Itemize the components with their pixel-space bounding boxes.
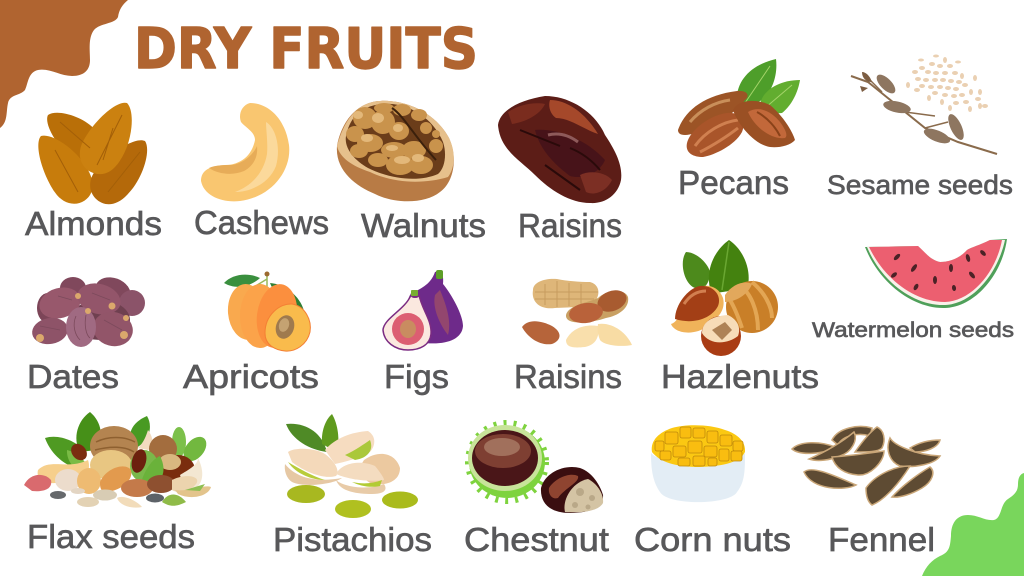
label: Fennel: Fennel — [828, 521, 935, 558]
icon: almonds — [24, 93, 161, 213]
icon: raisin (dried date) — [498, 96, 621, 203]
label: Dates: Dates — [27, 358, 119, 395]
icon: mixed nuts pile — [24, 412, 211, 508]
label: Watermelon seeds: Watermelon seeds — [812, 319, 1014, 342]
label: Raisins (peanuts row): Raisins — [514, 358, 622, 395]
icon: watermelon slice — [865, 239, 1007, 308]
icon: figs — [383, 270, 463, 350]
icon: pecans — [678, 59, 800, 157]
decorative brown corner blob — [0, 0, 128, 128]
icon: peanuts — [522, 279, 632, 347]
label: Corn nuts: Corn nuts — [634, 521, 791, 558]
icon: chestnuts — [468, 423, 603, 513]
icon: pistachios — [285, 414, 418, 518]
label: Chestnut: Chestnut — [464, 521, 609, 558]
label: Pistachios: Pistachios — [273, 521, 432, 558]
label: Cashews: Cashews — [194, 204, 329, 241]
icon: apricots — [224, 272, 310, 351]
label: Figs: Figs — [384, 358, 449, 395]
label: Walnuts: Walnuts — [361, 207, 486, 244]
label: Raisins: Raisins — [518, 207, 622, 244]
icon: fennel seeds — [792, 426, 940, 505]
label: Flax seeds: Flax seeds — [27, 518, 195, 555]
decorative green corner blob — [922, 473, 1024, 576]
label: Apricots: Apricots — [183, 358, 319, 395]
icon: sesame branch and seeds — [851, 54, 997, 154]
icon: walnut — [337, 101, 454, 201]
label: Sesame seeds: Sesame seeds — [827, 170, 1013, 200]
label: Almonds: Almonds — [25, 205, 162, 242]
title: DRY FRUITS — [134, 17, 478, 82]
icon: dates — [30, 273, 145, 351]
icon: corn nuts in white bowl — [651, 425, 745, 502]
label: Hazlenuts: Hazlenuts — [661, 358, 819, 395]
icon: cashew — [201, 103, 289, 201]
label: Pecans: Pecans — [678, 164, 789, 201]
icon: hazelnuts — [671, 240, 778, 356]
